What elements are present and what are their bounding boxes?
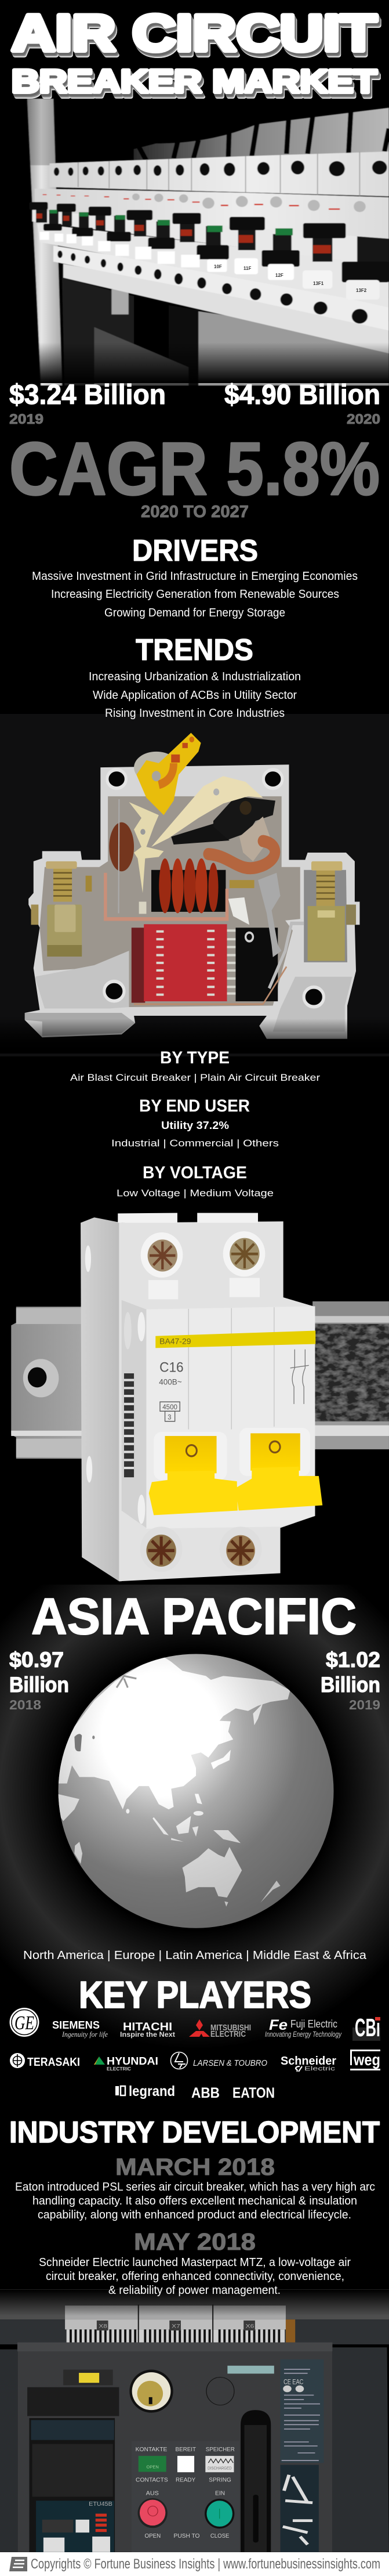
logo: ABB: ABB (191, 2085, 220, 2101)
march 2018 development (15, 2153, 375, 2221)
label: breaker tags: 13F2 (356, 288, 367, 293)
yellow toggle (134, 733, 201, 815)
breaker upper front (119, 1221, 315, 1581)
schneider electric development (39, 2228, 351, 2297)
yellow stripe with model (155, 1331, 315, 1348)
trends: Rising Investment in Core Industries (105, 707, 285, 720)
logo: Mitsubishi Electric (189, 2019, 251, 2039)
march 2018 development: Eaton introduced PSL series air circuit breaker, which has a very high arc (15, 2181, 375, 2193)
photo: open circuit breaker cutaway (0, 733, 389, 1054)
continents (57, 1655, 290, 1907)
logo: Mitsubishi Electric: MITSUBISHI (210, 2023, 251, 2033)
globe (57, 1654, 334, 1928)
button panel: KONTAKTE (136, 2446, 168, 2453)
by type (70, 1048, 320, 1083)
logo: Hyundai Electric: HYUNDAI (107, 2055, 158, 2067)
asia pacific value 2019: Billion (321, 1673, 380, 1697)
label: breaker tags: 11F (243, 266, 251, 271)
march 2018 development: MARCH 2018 (115, 2153, 275, 2180)
title line 1: AIR CIRCUIT (12, 4, 377, 62)
photo: panel of miniature circuit breakers (0, 99, 389, 385)
logo: Larsen and Toubro (170, 2052, 267, 2069)
button panel: OPEN (146, 2465, 159, 2469)
label: breaker tags: 12F (275, 273, 283, 278)
photo: masterpact air circuit breaker front panel (0, 2290, 389, 2552)
schneider electric development: MAY 2018 (134, 2228, 256, 2255)
photo: masterpact air circuit breaker front panel: X7 (172, 2324, 180, 2329)
cream lever (151, 776, 263, 847)
black linkage (171, 824, 230, 845)
asia pacific value 2018 (9, 1648, 69, 1712)
label: breaker tags: 13F1 (313, 281, 324, 286)
logo: Larsen and Toubro: LARSEN & TOUBRO (193, 2058, 267, 2068)
ratings: C16 (159, 1359, 184, 1375)
button panel: OPEN (144, 2532, 161, 2539)
breaker side front bevel (122, 1300, 146, 1528)
market value 2020 (224, 380, 380, 427)
asia pacific value 2018: $0.97 (9, 1648, 64, 1672)
logo: Siemens: Ingenuity for life (61, 2030, 108, 2039)
drivers: Massive Investment in Grid Infrastructure in Emerging Economies (32, 570, 358, 583)
asia pacific background (0, 1585, 389, 2049)
trends: TRENDS (136, 633, 253, 667)
breaker front face (146, 1306, 315, 1529)
ratings: 4500 (162, 1403, 177, 1411)
market value 2019: $3.24 Billion (9, 380, 166, 410)
asia pacific value 2018: 2018 (9, 1697, 41, 1712)
logo: WEG: weg (353, 2051, 380, 2069)
button panel: SPEICHER (206, 2446, 235, 2453)
asia pacific value 2018: Billion (9, 1673, 69, 1697)
key lock (129, 2370, 173, 2413)
logo: Hyundai Electric (94, 2055, 158, 2072)
logo: Fuji Electric: Fe (269, 2017, 288, 2033)
schneider electric development: Schneider Electric launched Masterpact MTZ, a low-voltage air (39, 2256, 351, 2269)
button panel: PUSH TO (174, 2532, 199, 2539)
logo: Mitsubishi Electric: ELECTRIC (210, 2029, 246, 2039)
title line 2: BREAKER MARKET (12, 63, 377, 99)
breaker shell (25, 764, 359, 1039)
logo: WEG (350, 2050, 380, 2070)
breaker body side (81, 1217, 122, 1581)
ratings: 3 (168, 1414, 171, 1422)
yellow tag (63, 2370, 113, 2385)
wiring diagram (290, 1350, 309, 1404)
trends: Increasing Urbanization & Industrialization (89, 670, 301, 683)
ETU trip unit: ETU45B (89, 2501, 112, 2508)
trends (89, 633, 301, 720)
logo: Hitachi (120, 2021, 175, 2039)
label: breaker tags (214, 264, 367, 293)
yellow stripe with model: BA47-29 (159, 1337, 191, 1346)
other regions: North America | Europe | Latin America | Middle East & Africa (23, 1949, 367, 1962)
title (12, 4, 377, 99)
photo: masterpact air circuit breaker front panel: X6 (246, 2324, 254, 2329)
ratings plate: CE EAC (283, 2378, 304, 2386)
caspian sea (74, 1734, 82, 1751)
lower screws (140, 1527, 261, 1572)
logo: Hitachi: Inspire the Next (120, 2030, 175, 2039)
by end user: BY END USER (139, 1096, 250, 1116)
button panel: BEREIT (176, 2446, 196, 2453)
mounting holes (104, 770, 323, 1007)
button panel: EIN (215, 2490, 225, 2496)
logo: GE: GE (14, 2012, 34, 2034)
logo: Hitachi: HITACHI (123, 2021, 172, 2033)
din rail right (312, 1301, 389, 1449)
by voltage (117, 1163, 274, 1199)
button panel: DISCHARGED (208, 2466, 232, 2470)
icon: fortune business insights (9, 2557, 27, 2571)
coil (106, 858, 255, 925)
by voltage: Low Voltage | Medium Voltage (117, 1188, 274, 1199)
market value 2019: 2019 (9, 412, 43, 427)
ratings plate (281, 2359, 323, 2552)
photo: masterpact air circuit breaker front panel: X8 (99, 2324, 107, 2329)
logo: Legrand: legrand (129, 2083, 175, 2099)
logo: Schneider Electric: Schneider (281, 2055, 336, 2068)
upper wiring band (0, 2290, 389, 2319)
logo: CBI (352, 2014, 380, 2042)
contact arm (258, 873, 282, 957)
logo: Terasaki (10, 2053, 80, 2069)
by end user: Utility 37.2% (161, 1120, 229, 1131)
label: breaker tags: 10F (214, 264, 222, 269)
asia pacific value 2019: $1.02 (326, 1648, 380, 1672)
button panel: READY (176, 2477, 195, 2483)
button panel: AUS (146, 2490, 159, 2496)
blue plate (227, 2366, 274, 2373)
drivers: Increasing Electricity Generation from Renewable Sources (51, 588, 339, 601)
logo: Eaton: EATON (232, 2085, 275, 2101)
march 2018 development: handling capacity. It also offers excellent mechanical & insulation (32, 2195, 357, 2207)
logo: Siemens: SIEMENS (52, 2019, 100, 2031)
trends: Wide Application of ACBs in Utility Sector (93, 689, 297, 702)
industry development heading: INDUSTRY DEVELOPMENT (9, 2116, 380, 2149)
din rail left (11, 1307, 86, 1459)
breaker housing (17, 2343, 332, 2552)
drivers (32, 534, 358, 619)
button panel: CONTACTS (136, 2477, 168, 2483)
left dark panel (27, 2387, 119, 2416)
logo: Schneider Electric: Electric (304, 2065, 335, 2072)
key players heading: KEY PLAYERS (79, 1974, 311, 2016)
logo: Terasaki: TERASAKI (27, 2056, 80, 2069)
footer (0, 2552, 389, 2576)
logo: Fuji Electric: Fuji Electric (290, 2018, 337, 2030)
drivers: Growing Demand for Energy Storage (104, 607, 285, 619)
logo: Siemens (52, 2019, 108, 2039)
baltic inlet (117, 1676, 136, 1687)
ratings: 400B~ (159, 1377, 182, 1386)
by end user: Industrial | Commercial | Others (111, 1138, 279, 1149)
ETU trip unit (36, 2501, 114, 2552)
asia pacific heading: ASIA PACIFIC (31, 1588, 357, 1645)
logo: Hyundai Electric: ELECTRIC (107, 2066, 131, 2072)
logo: Fuji Electric: Innovating Energy Technology (265, 2030, 342, 2039)
asia pacific value 2019 (321, 1648, 380, 1712)
toggle switches (149, 1428, 322, 1515)
schneider electric development: & reliability of power management. (108, 2284, 281, 2297)
logo: GE (9, 2008, 39, 2037)
market value 2020: $4.90 Billion (224, 380, 380, 410)
by end user (111, 1096, 279, 1149)
right terminal (308, 861, 356, 961)
breaker chamber (39, 796, 300, 1007)
breaker cutaway background (0, 714, 389, 1056)
march 2018 development: capability, along with enhanced product and electrical lifecycle. (38, 2209, 351, 2221)
din clip (25, 1013, 135, 1036)
logo: Fuji Electric (265, 2017, 342, 2039)
silver contact (239, 817, 270, 861)
CAGR: 2020 TO 2027 (141, 503, 249, 521)
drivers: DRIVERS (132, 534, 258, 568)
arc chute (132, 924, 278, 1003)
asia pacific value 2019: 2019 (349, 1697, 380, 1712)
button panel (132, 2441, 239, 2552)
ratings (159, 1359, 184, 1422)
button panel: CLOSE (210, 2532, 230, 2539)
by type: Air Blast Circuit Breaker | Plain Air Circuit Breaker (70, 1072, 320, 1083)
schneider electric development: circuit breaker, offering enhanced connectivity, convenience, (46, 2270, 344, 2283)
handle slot (241, 2410, 271, 2552)
cream trip parts (129, 802, 163, 893)
upper screws (141, 1231, 265, 1299)
photo: two-pole breaker on din rail (11, 1213, 389, 1581)
button panel: SPRING (209, 2477, 231, 2483)
market value 2019 (9, 380, 166, 427)
by type: BY TYPE (160, 1048, 230, 1067)
market value 2020: 2020 (347, 412, 380, 427)
left terminal (31, 861, 92, 957)
barcode (124, 1373, 134, 1477)
copper braid (208, 841, 275, 868)
by voltage: BY VOLTAGE (143, 1163, 247, 1182)
